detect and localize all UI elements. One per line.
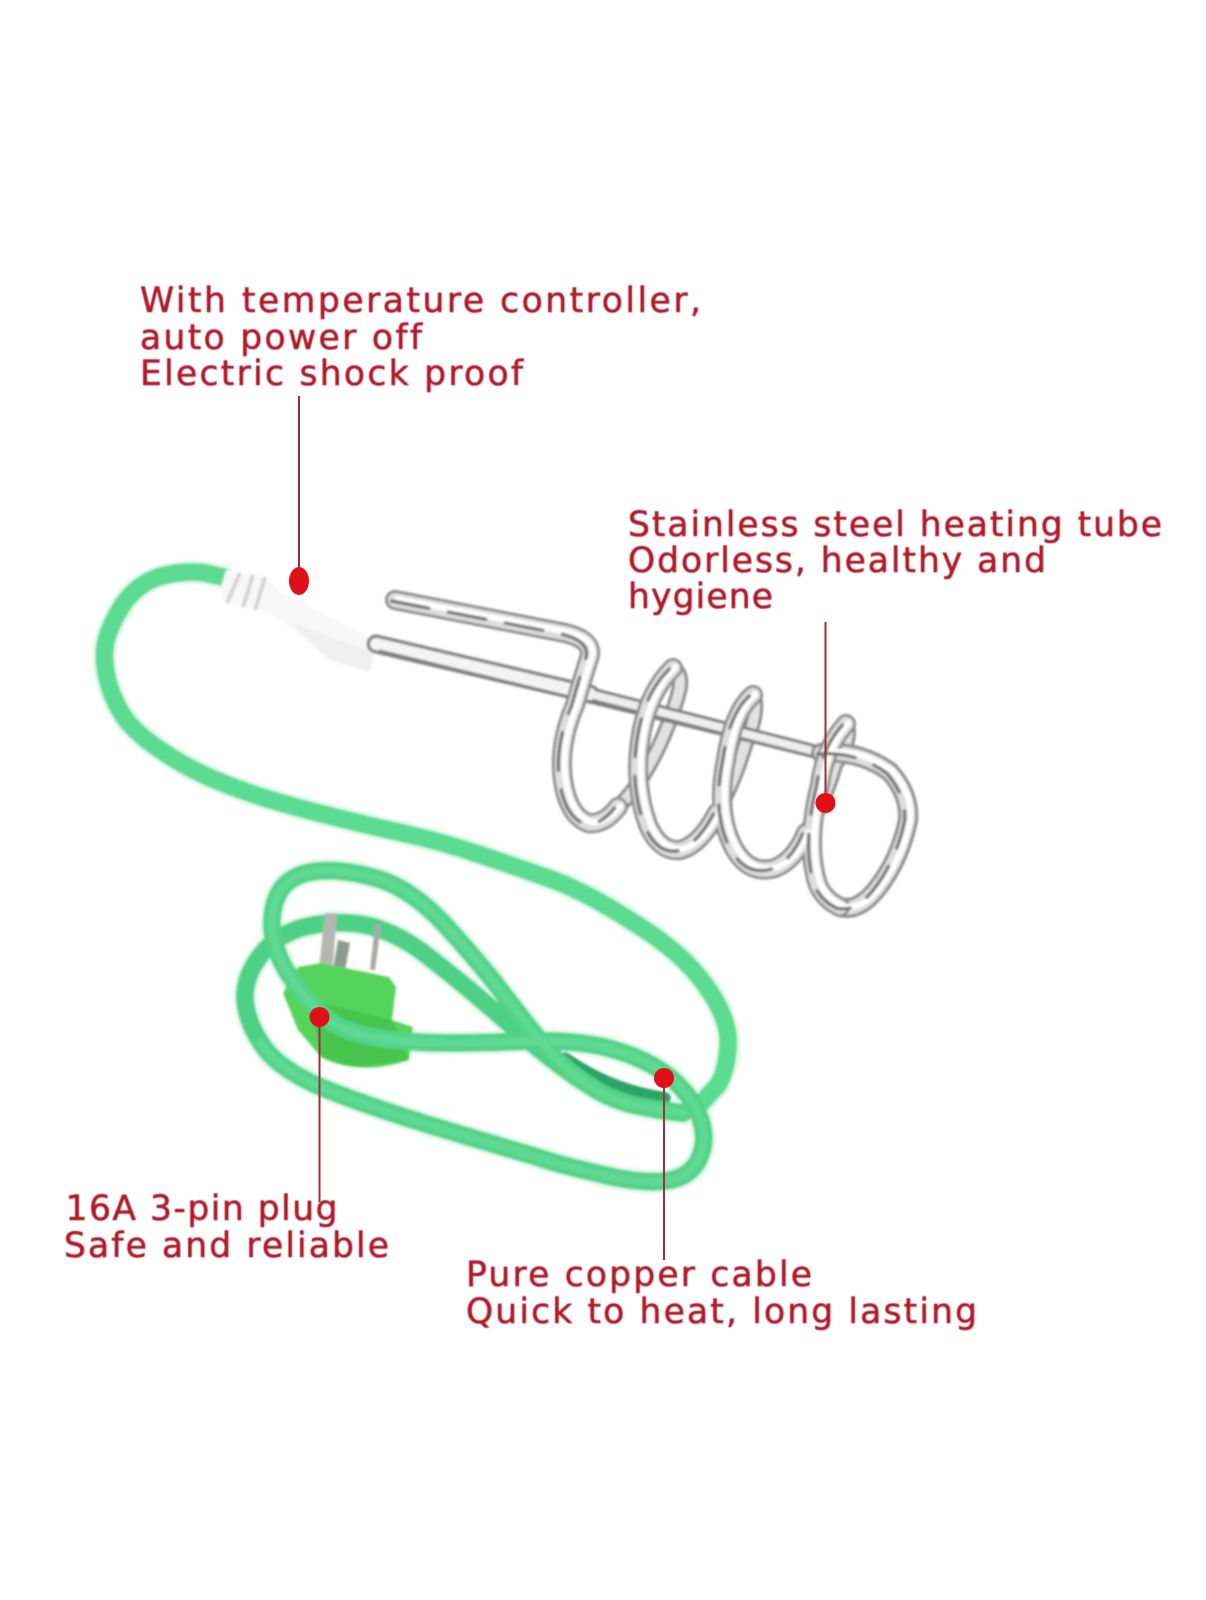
- callout: copper cable: [466, 1068, 977, 1332]
- heater product photo: [104, 570, 911, 1182]
- callout: temperature controller: [140, 281, 701, 595]
- text: tube: Odorless, healthy and: [628, 541, 1046, 581]
- text: tube: [628, 505, 1162, 617]
- dark cable shadow: [565, 1058, 665, 1098]
- text: cable: [466, 1255, 977, 1332]
- marker: controller: [289, 567, 309, 595]
- cord front strand: [261, 871, 704, 1182]
- callout: heating tube: [628, 505, 1162, 813]
- marker: cable: [654, 1068, 674, 1088]
- text: cable: Quick to heat, long lasting: [466, 1292, 977, 1332]
- text: cable: Pure copper cable: [466, 1255, 812, 1295]
- white connector: [220, 570, 375, 672]
- leader line: tube: [824, 622, 826, 802]
- text: plug: 16A 3-pin plug: [66, 1189, 338, 1229]
- marker: plug: [310, 1007, 330, 1027]
- text: plug: Safe and reliable: [64, 1226, 389, 1266]
- marker: tube: [816, 793, 836, 813]
- text: controller: [140, 281, 701, 394]
- text: plug: [64, 1189, 389, 1266]
- text: controller: With temperature controller,: [140, 281, 701, 321]
- callout: plug: [64, 1007, 389, 1266]
- leader line: controller: [298, 396, 300, 580]
- leader line: cable: [663, 1078, 665, 1260]
- plug: [283, 913, 413, 1068]
- text: tube: Stainless steel heating tube: [628, 505, 1162, 545]
- leader line: plug: [318, 1017, 320, 1202]
- power cord: [104, 572, 728, 1182]
- text: controller: auto power off: [140, 318, 423, 358]
- text: controller: Electric shock proof: [140, 354, 524, 394]
- text: tube: hygiene: [628, 577, 773, 617]
- stainless steel heating coil: [376, 599, 911, 909]
